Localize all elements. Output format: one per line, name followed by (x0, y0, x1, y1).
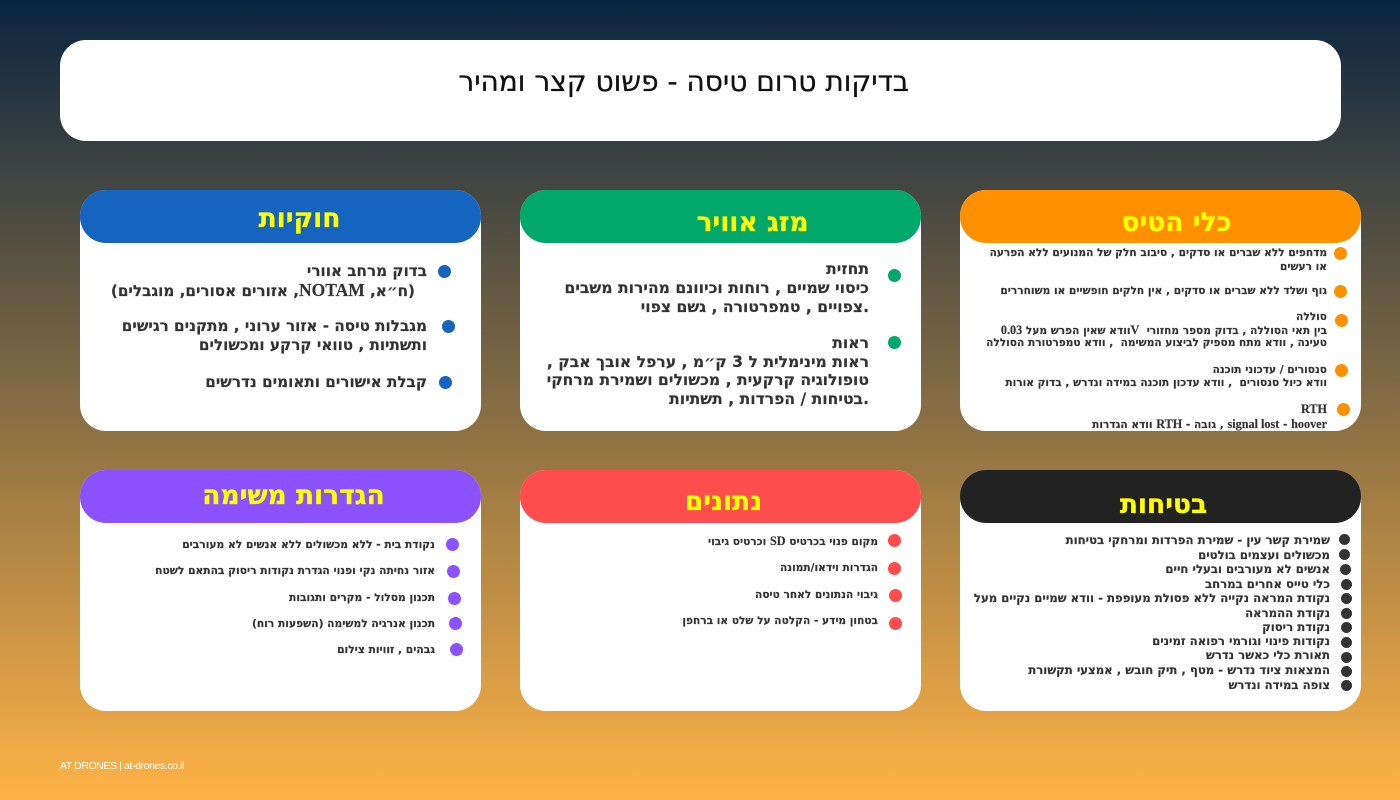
item: battery: סוללה (1296, 311, 1327, 323)
item: sensors: וודא כיול סנסורים , וודא עדכון תוכנה במידה ונדרש , בדוק אורות (1005, 377, 1327, 389)
heading: safety (960, 470, 1361, 523)
item: sensors: סנסורים / עדכוני תוכנה (1213, 364, 1327, 376)
item: equipment: המצאות ציוד נדרש - מטף , תיק חובש , אמצעי תקשורת (1028, 663, 1330, 677)
item: visibility: .בטיחות / הפרדות , תשתיות (669, 390, 869, 408)
heading: safety: בטיחות (1120, 489, 1207, 520)
heading: mission settings: הגדרות משימה (202, 480, 385, 511)
item: information security: בטחון מידע - הקלטה על שלט או ברחפן (682, 615, 878, 627)
heading: regulations (80, 190, 481, 243)
item: observer: צופה במידה ונדרש (1228, 678, 1330, 692)
item: visibility: ראות (832, 334, 869, 352)
heading: aircraft: כלי הטיס (1121, 207, 1232, 238)
item: line of sight: שמירת קשר עין - שמירת הפרדות ומרחקי בטיחות (1066, 533, 1330, 547)
item: airspace (111, 262, 451, 300)
panel: regulations (80, 190, 481, 431)
heading: data (520, 470, 921, 523)
heading: regulations: חוקיות (259, 203, 340, 234)
item: visibility: ראות מינימלית ל 3 ק״מ , ערפל אובך אבק , (547, 353, 869, 371)
item: energy planning: תכנון אנרגיה למשימה (השפעות רוח) (252, 617, 435, 630)
item: visibility: טופולוגיה קרקעית , מכשולים ושמירת מרחקי (547, 371, 869, 389)
item: propellers: או רעשים (1280, 261, 1327, 273)
panel: mission settings (80, 470, 481, 711)
item: SD card: מקום פנוי בכרטיס SD וכרטיס גיבוי (708, 534, 878, 548)
heading: data: נתונים (685, 486, 762, 517)
item: forecast: תחזית (826, 260, 869, 278)
heading: weather (520, 190, 921, 243)
item: people: אנשים לא מעורבים ובעלי חיים (1165, 562, 1330, 576)
item: RTH: RTH (1301, 402, 1327, 416)
heading: weather: מזג אוויר (696, 207, 809, 238)
item: battery (986, 311, 1348, 349)
heading: mission settings (80, 470, 481, 523)
item: landing area: אזור נחיתה נקי ופנוי הגדרת נקודות ריסוק בהתאם לשטח (155, 564, 435, 577)
item: evacuation: נקודות פינוי וגורמי רפואה זמינים (1152, 634, 1330, 648)
item: flight limits: מגבלות טיסה - אזור ערוני , מתקנים רגישים (122, 317, 427, 335)
panel: safety (960, 470, 1361, 711)
heading: aircraft (960, 190, 1361, 243)
item: approvals: קבלת אישורים ותאומים נדרשים (205, 373, 427, 391)
panel: weather (520, 190, 921, 431)
item: lighting: תאורת כלי כאשר נדרש (1206, 648, 1330, 662)
item: spray point: נקודת ריסוק (1262, 620, 1330, 634)
item: obstacles: מכשולים ועצמים בולטים (1198, 548, 1330, 562)
item: propellers (990, 247, 1347, 273)
panel: data (520, 470, 921, 711)
item: flight limits: ותשתיות , טוואי קרקע ומכשולים (199, 336, 427, 354)
item: battery: בין תאי הסוללה , בדוק מספר מחזורי Vוודא שאין הפרש מעל 0.03 (1001, 323, 1327, 337)
item: forecast: כיסוי שמיים , רוחות וכיוונם מהירות משבים (564, 279, 869, 297)
item: backup: גיבוי הנתונים לאחר טיסה (755, 589, 878, 601)
item: airspace: בדוק מרחב אוורי (307, 262, 427, 280)
item: propellers: מדחפים ללא שברים או סדקים , סיבוב חלק של המנועים ללא הפרעה (990, 247, 1327, 259)
item: takeoff point: נקודת ההמראה (1245, 606, 1330, 620)
panel: aircraft (960, 190, 1361, 431)
title: בדיקות טרום טיסה - פשוט קצר ומהיר (458, 65, 909, 98)
item: flight limits (122, 317, 455, 354)
item: visibility (547, 334, 901, 408)
item: video settings: הגדרות וידאו/תמונה (780, 562, 878, 574)
item: battery: טעינה , וודא מתח מספיק לביצוע המשימה , וודא טמפרטורת הסוללה (986, 337, 1327, 349)
item: altitudes: גבהים , זוויות צילום (337, 643, 435, 656)
item: body: גוף ושלד ללא שברים או סדקים , אין חלקים חופשיים או משוחררים (1000, 285, 1327, 297)
item: other pilots: כלי טייס אחרים במרחב (1205, 577, 1330, 591)
item: RTH: hoover - signal lost , גובה - RTH וודא הגדרות (1092, 416, 1327, 430)
title panel (60, 40, 1341, 141)
item: forecast (564, 260, 901, 316)
item: RTH (1092, 402, 1350, 431)
footer: AT DRONES | at-drones.co.il (60, 760, 184, 772)
item: forecast: .צפויים , טמפרטורה , גשם צפוי (641, 298, 869, 316)
item: takeoff point clean: נקודת המראה נקייה ללא פסולת מעופפת - וודא שמיים נקיים מעל (974, 591, 1330, 605)
item: airspace: (ח״א, NOTAM, אזורים אסורים, מוגבלים) (111, 280, 415, 300)
item: sensors (1005, 364, 1348, 389)
item: route planning: תכנון מסלול - מקרים ותגובות (289, 591, 435, 604)
item: home point: נקודת בית - ללא מכשולים ללא אנשים לא מעורבים (182, 538, 435, 551)
